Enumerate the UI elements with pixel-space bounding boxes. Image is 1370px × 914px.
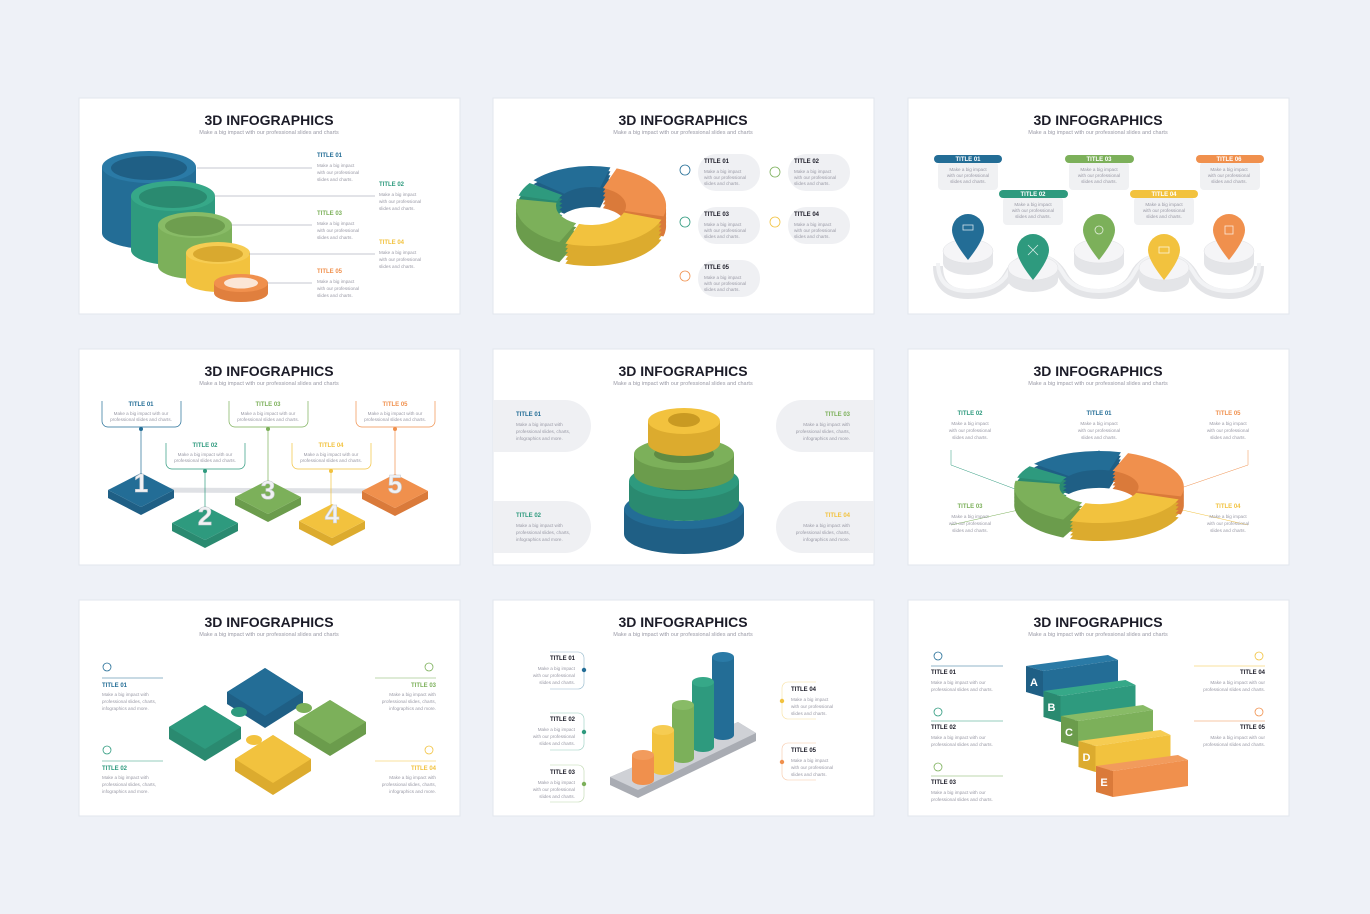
labels: Make a big impact <box>1209 514 1247 519</box>
text blocks: infographics and more. <box>389 706 436 711</box>
callouts <box>680 154 850 297</box>
text blocks: professional slides and charts. <box>931 797 993 802</box>
text blocks: TITLE 03 <box>411 683 437 689</box>
labels: Make a big impact <box>1080 421 1118 426</box>
labels: TITLE 01 <box>955 157 981 163</box>
tiles: 5 <box>388 469 402 499</box>
callouts: TITLE 05 <box>791 748 817 754</box>
subtitle: Make a big impact with our professional slides and charts <box>613 381 753 387</box>
labels: with our professional <box>949 428 991 433</box>
callouts: TITLE 04 <box>794 212 820 218</box>
text blocks: professional slides and charts. <box>1203 742 1265 747</box>
callouts: with our professional <box>704 228 746 233</box>
labels: with our professional <box>949 521 991 526</box>
text blocks: Make a big impact with <box>389 775 436 780</box>
callouts: Make a big impact <box>538 727 576 732</box>
callouts: TITLE 03 <box>550 770 576 776</box>
chart: steps: A <box>1030 677 1038 689</box>
panel: numbered tiles: professional slides and charts. <box>300 458 362 463</box>
labels: with our professional <box>1012 208 1054 213</box>
chart: cylinders on platform <box>610 652 756 798</box>
panel: map pins <box>908 98 1289 314</box>
chart: steps: D <box>1083 752 1091 764</box>
callouts: with our professional <box>533 787 575 792</box>
text blocks: infographics and more. <box>102 789 149 794</box>
tiles: 1 <box>134 468 148 498</box>
callouts: with our professional <box>791 765 833 770</box>
subtitle: Make a big impact with our professional slides and charts <box>199 130 339 136</box>
tiles: 3 <box>261 475 275 505</box>
text: title 04: slides and charts. <box>379 264 415 269</box>
text: title 01: slides and charts. <box>317 177 353 182</box>
text: title 04: with our professional <box>379 257 421 262</box>
labels: with our professional <box>1078 173 1120 178</box>
callouts: slides and charts. <box>794 181 830 186</box>
subtitle: Make a big impact with our professional slides and charts <box>199 381 339 387</box>
labels: Make a big impact <box>1209 421 1247 426</box>
text: titles: Make a big impact with <box>803 523 850 528</box>
labels: Make a big impact <box>1080 167 1118 172</box>
panel: numbered tiles: professional slides and charts. <box>364 417 426 422</box>
labels: with our professional <box>1208 173 1250 178</box>
text: title 01: with our professional <box>317 170 359 175</box>
callouts: with our professional <box>794 175 836 180</box>
text blocks: professional slides, charts, <box>102 699 156 704</box>
text: title 05 <box>317 269 359 298</box>
text: title 05: Make a big impact <box>317 279 355 284</box>
labels: slides and charts. <box>952 528 988 533</box>
text: titles: infographics and more. <box>803 537 850 542</box>
text: titles: infographics and more. <box>516 436 563 441</box>
labels: Make a big impact <box>951 421 989 426</box>
chart: donut <box>1014 451 1184 541</box>
text blocks: TITLE 04 <box>1240 670 1266 676</box>
text: title 02 <box>379 182 421 211</box>
subtitle: Make a big impact with our professional slides and charts <box>613 632 753 638</box>
text blocks: professional slides and charts. <box>931 742 993 747</box>
text blocks: Make a big impact with our <box>1210 680 1265 685</box>
text blocks: TITLE 02 <box>931 725 957 731</box>
callouts: Make a big impact <box>704 169 742 174</box>
pins <box>952 214 1245 280</box>
text blocks: infographics and more. <box>102 706 149 711</box>
panel: 3D bar chart <box>493 600 874 816</box>
callout boxes <box>102 401 435 507</box>
text: titles: TITLE 01 <box>516 412 542 418</box>
labels: TITLE 04 <box>1215 504 1241 510</box>
callouts: TITLE 01 <box>704 159 730 165</box>
labels: slides and charts. <box>1210 435 1246 440</box>
callouts: Make a big impact <box>704 222 742 227</box>
text: titles <box>516 412 851 542</box>
text: titles: professional slides, charts, <box>516 530 570 535</box>
chart: ring stack <box>624 408 744 554</box>
callouts: slides and charts. <box>704 287 740 292</box>
labels: slides and charts. <box>1211 179 1247 184</box>
heading: 3D INFOGRAPHICS <box>1033 112 1163 128</box>
text: titles: Make a big impact with <box>516 523 563 528</box>
callouts: Make a big impact <box>791 758 829 763</box>
callouts: with our professional <box>794 228 836 233</box>
labels: slides and charts. <box>952 435 988 440</box>
subtitle: Make a big impact with our professional slides and charts <box>1028 632 1168 638</box>
panel: numbered tiles: Make a big impact with our <box>178 452 233 457</box>
callouts: slides and charts. <box>791 772 827 777</box>
text: title 02: slides and charts. <box>379 206 415 211</box>
labels: slides and charts. <box>1081 179 1117 184</box>
text blocks: infographics and more. <box>389 789 436 794</box>
text: title 04 <box>379 240 421 269</box>
callouts: slides and charts. <box>539 680 575 685</box>
text: title 03: with our professional <box>317 228 359 233</box>
callouts: TITLE 04 <box>791 687 817 693</box>
text blocks: TITLE 01 <box>102 683 128 689</box>
callouts: TITLE 02 <box>794 159 820 165</box>
text blocks: TITLE 04 <box>411 766 437 772</box>
callouts: slides and charts. <box>791 711 827 716</box>
callouts: Make a big impact <box>538 666 576 671</box>
text: titles: Make a big impact with <box>516 422 563 427</box>
text blocks <box>931 652 1266 802</box>
callouts: with our professional <box>791 704 833 709</box>
text: title 05: slides and charts. <box>317 293 353 298</box>
panel: numbered tiles: Make a big impact with our <box>114 411 169 416</box>
text: title 02: Make a big impact <box>379 192 417 197</box>
callouts: Make a big impact <box>794 222 832 227</box>
callouts: TITLE 02 <box>550 717 576 723</box>
text blocks: TITLE 03 <box>931 780 957 786</box>
labels: Make a big impact <box>1145 202 1183 207</box>
panel: cylinders <box>79 98 460 314</box>
panel: puzzle <box>79 600 460 816</box>
chart: steps <box>1026 655 1188 797</box>
callouts: TITLE 03 <box>704 212 730 218</box>
text blocks: professional slides and charts. <box>1203 687 1265 692</box>
text: title 05: TITLE 05 <box>317 269 343 275</box>
panel: numbered tiles: professional slides and charts. <box>174 458 236 463</box>
text blocks: TITLE 01 <box>931 670 957 676</box>
heading: 3D INFOGRAPHICS <box>204 112 334 128</box>
chart: stacked cylinders <box>102 151 268 302</box>
subtitle: Make a big impact with our professional slides and charts <box>199 632 339 638</box>
labels: with our professional <box>1078 428 1120 433</box>
text: title 05: with our professional <box>317 286 359 291</box>
panel: numbered tiles: Make a big impact with our <box>241 411 296 416</box>
text: title 02: with our professional <box>379 199 421 204</box>
text: title 04: Make a big impact <box>379 250 417 255</box>
panel: numbered tiles: professional slides and charts. <box>110 417 172 422</box>
labels <box>934 155 1264 225</box>
labels: TITLE 01 <box>1086 411 1112 417</box>
panel: numbered tiles: professional slides and charts. <box>237 417 299 422</box>
callouts: slides and charts. <box>704 181 740 186</box>
callouts: Make a big impact <box>704 275 742 280</box>
heading: 3D INFOGRAPHICS <box>204 614 334 630</box>
panel: wide donut <box>908 349 1289 565</box>
text: title 02: TITLE 02 <box>379 182 405 188</box>
panel: numbered tiles: TITLE 04 <box>318 443 344 449</box>
text blocks: professional slides, charts, <box>102 782 156 787</box>
panel: exploded donut <box>493 98 874 314</box>
tiles: 4 <box>325 499 340 529</box>
panel: numbered tiles: TITLE 05 <box>382 402 408 408</box>
text: titles: infographics and more. <box>516 537 563 542</box>
labels: TITLE 03 <box>957 504 983 510</box>
heading: 3D INFOGRAPHICS <box>618 363 748 379</box>
text blocks: Make a big impact with our <box>931 790 986 795</box>
labels: with our professional <box>1143 208 1185 213</box>
labels: slides and charts. <box>950 179 986 184</box>
heading: 3D INFOGRAPHICS <box>618 112 748 128</box>
text: titles: TITLE 04 <box>825 513 851 519</box>
callouts: Make a big impact <box>794 169 832 174</box>
tiles <box>108 468 428 548</box>
labels: Make a big impact <box>1210 167 1248 172</box>
platforms track <box>938 239 1259 294</box>
callouts: slides and charts. <box>539 794 575 799</box>
text blocks: professional slides, charts, <box>382 782 436 787</box>
subtitle: Make a big impact with our professional slides and charts <box>613 130 753 136</box>
text blocks: Make a big impact with <box>102 692 149 697</box>
labels: TITLE 05 <box>1215 411 1241 417</box>
callouts: with our professional <box>704 175 746 180</box>
text blocks: Make a big impact with our <box>931 735 986 740</box>
labels <box>949 411 1249 533</box>
callouts: Make a big impact <box>791 697 829 702</box>
labels: TITLE 04 <box>1151 192 1177 198</box>
text blocks: professional slides, charts, <box>382 699 436 704</box>
text: title 03: TITLE 03 <box>317 211 343 217</box>
text: titles: TITLE 03 <box>825 412 851 418</box>
tiles: 2 <box>198 501 212 531</box>
text: title 01: Make a big impact <box>317 163 355 168</box>
labels: with our professional <box>947 173 989 178</box>
text: title 01 <box>317 153 359 182</box>
text blocks: Make a big impact with our <box>1210 735 1265 740</box>
heading: 3D INFOGRAPHICS <box>1033 363 1163 379</box>
panel: numbered tiles: TITLE 02 <box>192 443 218 449</box>
labels: Make a big impact <box>951 514 989 519</box>
heading: 3D INFOGRAPHICS <box>1033 614 1163 630</box>
chart: steps: B <box>1048 702 1056 714</box>
labels: slides and charts. <box>1210 528 1246 533</box>
callouts: Make a big impact <box>538 780 576 785</box>
text blocks: Make a big impact with <box>102 775 149 780</box>
text blocks: Make a big impact with <box>389 692 436 697</box>
callouts: with our professional <box>533 673 575 678</box>
heading: 3D INFOGRAPHICS <box>618 614 748 630</box>
labels: with our professional <box>1207 428 1249 433</box>
text: titles: TITLE 02 <box>516 513 542 519</box>
callouts: slides and charts. <box>794 234 830 239</box>
heading: 3D INFOGRAPHICS <box>204 363 334 379</box>
labels: TITLE 02 <box>1020 192 1046 198</box>
text blocks: Make a big impact with our <box>931 680 986 685</box>
text: title 03: Make a big impact <box>317 221 355 226</box>
labels: slides and charts. <box>1146 214 1182 219</box>
puzzle pieces <box>169 668 366 795</box>
text: title 03: slides and charts. <box>317 235 353 240</box>
text: titles: professional slides, charts, <box>516 429 570 434</box>
text blocks: professional slides and charts. <box>931 687 993 692</box>
subtitle: Make a big impact with our professional slides and charts <box>1028 130 1168 136</box>
text: titles: infographics and more. <box>803 436 850 441</box>
callouts: slides and charts. <box>539 741 575 746</box>
panel: steps A-E <box>908 600 1289 816</box>
chart: steps: E <box>1100 777 1108 789</box>
panel: numbered tiles: TITLE 01 <box>128 402 154 408</box>
connectors <box>141 490 395 491</box>
callouts: TITLE 01 <box>550 656 576 662</box>
subtitle: Make a big impact with our professional slides and charts <box>1028 381 1168 387</box>
labels: Make a big impact <box>949 167 987 172</box>
text blocks <box>102 663 437 794</box>
panel: numbered tiles: Make a big impact with our <box>304 452 359 457</box>
text blocks: TITLE 05 <box>1240 725 1266 731</box>
text: title 04: TITLE 04 <box>379 240 405 246</box>
labels: TITLE 06 <box>1216 157 1242 163</box>
text: title 03 <box>317 211 359 240</box>
labels: slides and charts. <box>1081 435 1117 440</box>
labels: TITLE 03 <box>1086 157 1112 163</box>
side pills <box>493 400 874 553</box>
callouts: slides and charts. <box>704 234 740 239</box>
text: title 01: TITLE 01 <box>317 153 343 159</box>
callouts: TITLE 05 <box>704 265 730 271</box>
panel: numbered tiles: TITLE 03 <box>255 402 281 408</box>
callouts <box>533 652 833 802</box>
panel: numbered tiles: Make a big impact with our <box>368 411 423 416</box>
panel: stacked rings <box>493 349 874 565</box>
chart: 3D donut <box>516 166 666 266</box>
text: titles: professional slides, charts, <box>796 530 850 535</box>
connectors <box>951 450 1248 525</box>
panel: numbered tiles <box>79 349 460 565</box>
labels: with our professional <box>1207 521 1249 526</box>
labels: slides and charts. <box>1015 214 1051 219</box>
chart: steps: C <box>1065 727 1073 739</box>
labels: TITLE 02 <box>957 411 983 417</box>
callouts: with our professional <box>704 281 746 286</box>
text: titles: professional slides, charts, <box>796 429 850 434</box>
labels: Make a big impact <box>1014 202 1052 207</box>
text blocks: TITLE 02 <box>102 766 128 772</box>
text: titles: Make a big impact with <box>803 422 850 427</box>
callouts: with our professional <box>533 734 575 739</box>
